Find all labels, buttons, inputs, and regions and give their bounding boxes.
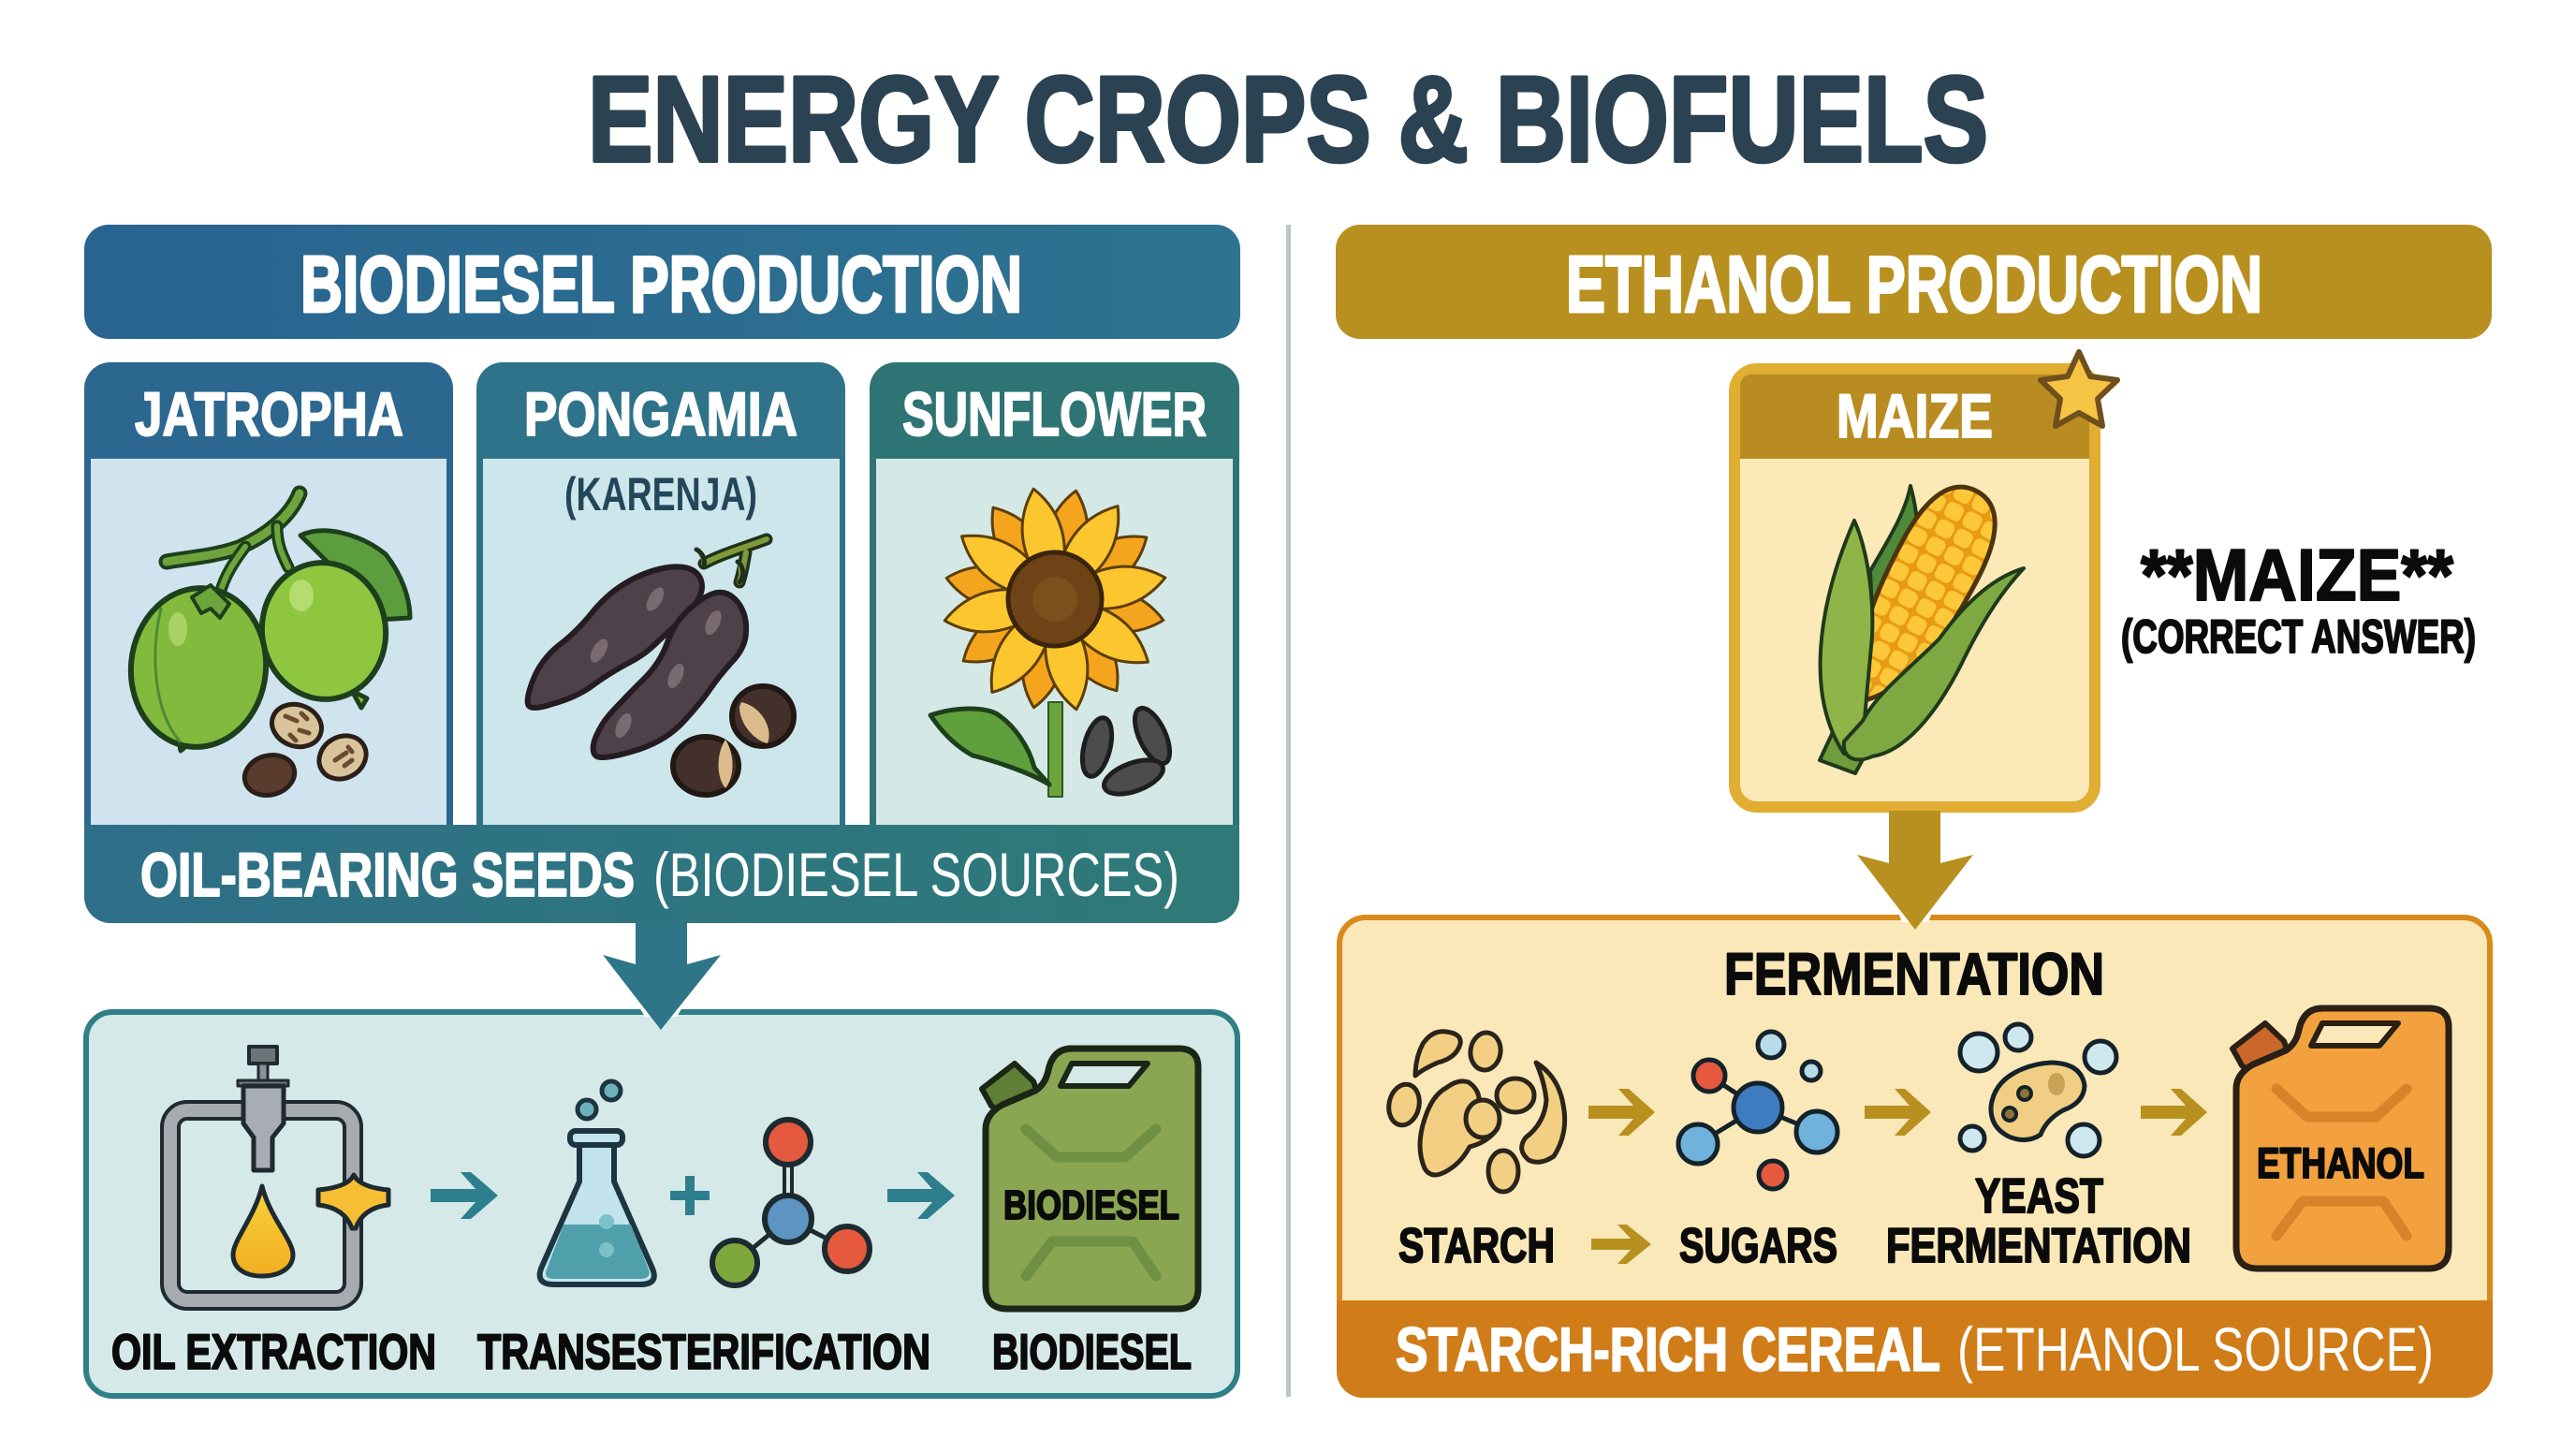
arrow: maize to fermentation bbox=[1857, 811, 1973, 930]
arrow: seeds to process bbox=[603, 923, 721, 1030]
heading: ethanol production: ETHANOL PRODUCTION bbox=[1566, 241, 2262, 330]
label: yeast fermentation bbox=[1886, 1169, 2191, 1273]
label on ethanol can: ETHANOL bbox=[2257, 1139, 2424, 1187]
icon: yeast cell bbox=[1960, 1024, 2116, 1156]
panel: fermentation bbox=[1337, 811, 2493, 1398]
panel: biodiesel production bbox=[84, 225, 1240, 1396]
arrow: transesterification to biodiesel bbox=[887, 1172, 955, 1219]
callout: correct answer: **MAIZE** bbox=[2141, 534, 2454, 616]
card: jatropha: JATROPHA bbox=[135, 379, 403, 448]
label on jerrycan: BIODIESEL bbox=[1003, 1182, 1179, 1228]
central divider bbox=[1286, 225, 1291, 1397]
arrow: starch label to sugars label bbox=[1591, 1225, 1651, 1264]
band: starch-rich cereal: (ETHANOL SOURCE) bbox=[1957, 1314, 2434, 1384]
icon: plus sign bbox=[670, 1176, 710, 1215]
panel: ethanol production bbox=[1336, 225, 2493, 1398]
heading: biodiesel production bbox=[84, 225, 1240, 339]
title: ENERGY CROPS & BIOFUELS bbox=[588, 51, 1988, 187]
heading: ethanol production bbox=[1336, 225, 2492, 339]
icon: biodiesel jerrycan bbox=[982, 1049, 1198, 1309]
label: transesterification: TRANSESTERIFICATION bbox=[477, 1325, 930, 1380]
card: jatropha bbox=[84, 362, 453, 843]
card: maize: MAIZE bbox=[1837, 381, 1993, 450]
band: oil-bearing seeds bbox=[84, 825, 1239, 923]
icon: sugar molecule bbox=[1678, 1032, 1837, 1189]
icon: oil press bbox=[170, 1047, 388, 1300]
callout: correct answer bbox=[2121, 534, 2476, 663]
card: pongamia bbox=[476, 362, 845, 843]
card: pongamia: PONGAMIA bbox=[524, 379, 798, 448]
label: oil extraction: OIL EXTRACTION bbox=[111, 1325, 436, 1380]
label: starch: STARCH bbox=[1398, 1219, 1555, 1273]
label: fermentation heading: FERMENTATION bbox=[1724, 942, 2104, 1007]
arrow: sugars to yeast bbox=[1865, 1089, 1931, 1136]
band: oil-bearing seeds: (BIODIESEL SOURCES) bbox=[653, 840, 1179, 909]
label: yeast fermentation: FERMENTATION bbox=[1886, 1219, 2191, 1273]
icon: molecule bbox=[712, 1120, 870, 1285]
label: yeast fermentation: YEAST bbox=[1975, 1169, 2103, 1224]
arrow: yeast to ethanol bbox=[2141, 1089, 2207, 1136]
heading: biodiesel production: BIODIESEL PRODUCTION bbox=[300, 241, 1022, 330]
band: starch-rich cereal bbox=[1337, 1300, 2493, 1398]
card: sunflower: SUNFLOWER bbox=[902, 379, 1207, 448]
icon: ethanol jerrycan bbox=[2232, 1008, 2449, 1269]
icon: jatropha fruits and seeds bbox=[124, 493, 410, 800]
card: sunflower bbox=[870, 362, 1239, 843]
icon: starch granules bbox=[1385, 1031, 1565, 1192]
icon: star bbox=[2041, 352, 2117, 426]
label: sugars: SUGARS bbox=[1679, 1219, 1837, 1273]
card: maize bbox=[1734, 352, 2117, 807]
icon: corn cob bbox=[1820, 472, 2024, 773]
card: pongamia: (KARENJA) bbox=[564, 468, 757, 521]
icon: sunflower and seeds bbox=[930, 485, 1177, 800]
arrow: extraction to transesterification bbox=[431, 1172, 498, 1219]
band: starch-rich cereal: STARCH-RICH CEREAL bbox=[1396, 1314, 1940, 1384]
band: oil-bearing seeds: OIL-BEARING SEEDS bbox=[140, 840, 635, 909]
arrow: starch to sugars bbox=[1588, 1089, 1655, 1136]
panel: biodiesel process bbox=[86, 923, 1237, 1396]
label: biodiesel: BIODIESEL bbox=[992, 1325, 1192, 1380]
icon: flask bbox=[540, 1081, 654, 1284]
icon: pongamia pods and seeds bbox=[528, 539, 794, 795]
